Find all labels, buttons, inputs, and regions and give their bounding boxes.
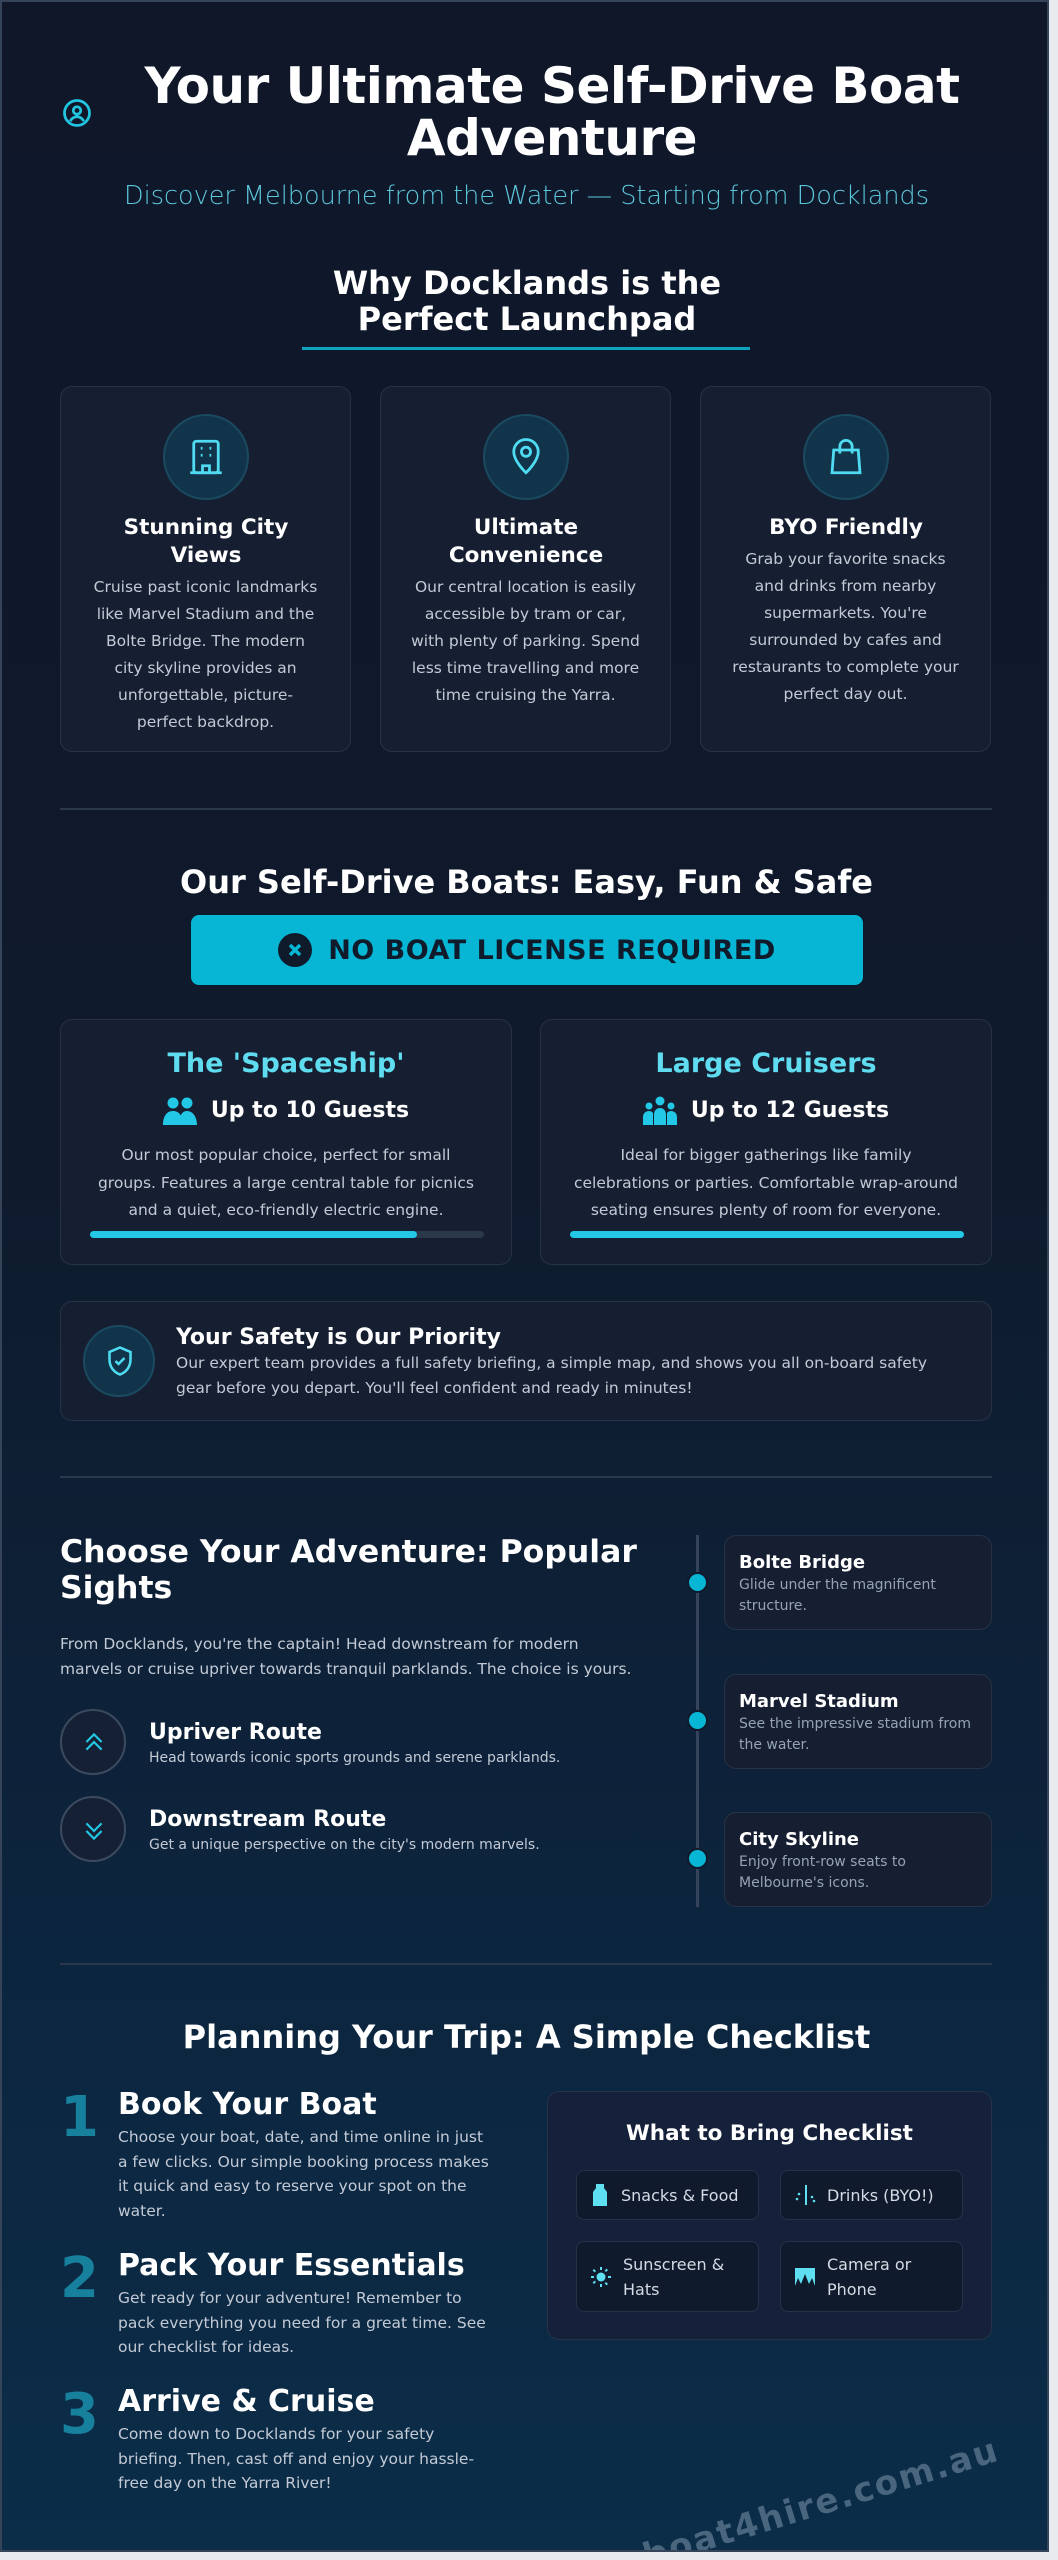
heading: choose adventure: Choose Your Adventure: Popular Sights (60, 1534, 637, 1606)
item: camera (780, 2241, 963, 2312)
stop: bolte bridge: Bolte Bridge (739, 1552, 865, 1573)
step 2: 2 (60, 2246, 99, 2311)
item: drinks (780, 2170, 963, 2220)
card text: supermarkets. You're (764, 604, 927, 622)
banner: no license: NO BOAT LICENSE REQUIRED (328, 934, 776, 966)
step 2: our checklist for ideas. (118, 2338, 294, 2356)
panel: what to bring (547, 2091, 992, 2340)
step 2: pack everything you need for a great time. See (118, 2314, 486, 2332)
icon: shopping bag (803, 414, 889, 500)
card text (411, 578, 640, 704)
step 3 (60, 2382, 474, 2492)
stop: bolte bridge (724, 1535, 992, 1630)
step 2: Get ready for your adventure! Remember to (118, 2289, 462, 2307)
panel: spaceship: The 'Spaceship' (167, 1048, 405, 1079)
card text: time cruising the Yarra. (435, 686, 616, 704)
card text: unforgettable, picture- (118, 686, 293, 704)
card text: less time travelling and more (412, 659, 639, 677)
card text: with plenty of parking. Spend (411, 632, 640, 650)
stop: city skyline (724, 1812, 992, 1907)
icon: building (163, 414, 249, 500)
card text: surrounded by cafes and (749, 631, 942, 649)
item: sunscreen (576, 2241, 759, 2312)
route: downstream: Downstream Route (149, 1807, 386, 1832)
guests line: Up to 10 Guests (211, 1098, 409, 1123)
panel: large cruisers: celebrations or parties. Comfortable wrap-around (574, 1174, 958, 1192)
stop: marvel stadium: Marvel Stadium (739, 1691, 899, 1712)
item: camera: Camera or (827, 2254, 911, 2274)
step 1: Choose your boat, date, and time online in just (118, 2128, 483, 2146)
panel: spaceship (60, 1019, 512, 1265)
route: upriver (60, 1709, 560, 1775)
step 1: water. (118, 2202, 166, 2220)
route: upriver: Upriver Route (149, 1720, 322, 1745)
step 3: Come down to Docklands for your safety (118, 2425, 434, 2443)
route: downstream: Get a unique perspective on the city's modern marvels. (149, 1837, 540, 1853)
card text: perfect backdrop. (137, 713, 274, 731)
item: sunscreen: Sunscreen & (623, 2254, 724, 2274)
title: Your Ultimate Self-Drive Boat Adventure (145, 57, 959, 167)
panel: what to bring: What to Bring Checklist (626, 2121, 913, 2146)
step 2: Pack Your Essentials (118, 2248, 465, 2283)
intro text: marvels or cruise upriver towards tranquil parklands. The choice is yours. (60, 1660, 631, 1678)
stop: bolte bridge: Glide under the magnificent structure. (739, 1577, 936, 1614)
capacity bar (90, 1231, 484, 1238)
stop: city skyline: City Skyline (739, 1829, 859, 1850)
card text: perfect day out. (783, 685, 908, 703)
timeline (687, 1535, 992, 1907)
icon: location pin (483, 414, 569, 500)
intro text: From Docklands, you're the captain! Head downstream for modern (60, 1635, 579, 1653)
panel: spaceship: and a quiet, eco-friendly electric engine. (128, 1201, 444, 1219)
route: downstream (60, 1796, 540, 1862)
panel: spaceship: Our most popular choice, perfect for small (122, 1146, 450, 1164)
card text: and drinks from nearby (755, 577, 936, 595)
panel: safety: gear before you depart. You'll feel confident and ready in minutes! (176, 1378, 693, 1396)
panel: large cruisers: Large Cruisers (655, 1048, 877, 1079)
panel: ultimate convenience (380, 386, 671, 752)
step 1: a few clicks. Our simple booking process makes (118, 2152, 489, 2170)
guests line: Up to 12 Guests (691, 1098, 889, 1123)
icon: x circle (278, 933, 312, 967)
heading: why docklands: Why Docklands is the Perfect Launchpad (333, 264, 721, 338)
panel: safety (60, 1301, 992, 1421)
route: upriver: Head towards iconic sports grounds and serene parklands. (149, 1750, 560, 1766)
stop: marvel stadium (724, 1674, 992, 1769)
panel: large cruisers (540, 1019, 992, 1265)
card title: BYO Friendly (769, 515, 923, 540)
heading: boats: Our Self-Drive Boats: Easy, Fun & Safe (180, 863, 873, 901)
panel: large cruisers: Ideal for bigger gatherings like family (620, 1146, 912, 1164)
step 1: Book Your Boat (118, 2087, 377, 2122)
step 3: briefing. Then, cast off and enjoy your hassle- (118, 2450, 474, 2468)
item: sunscreen: Hats (623, 2280, 659, 2298)
card text (732, 550, 959, 703)
panel: large cruisers: seating ensures plenty of room for everyone. (591, 1201, 941, 1219)
banner: no license (191, 915, 863, 985)
panel: safety: Your Safety is Our Priority (176, 1325, 501, 1350)
card title: Ultimate Convenience (449, 515, 603, 568)
intro text (60, 1635, 631, 1678)
card text: Bolte Bridge. The modern (106, 632, 305, 650)
step 3: 3 (60, 2382, 99, 2447)
item: drinks: Drinks (BYO!) (827, 2186, 934, 2204)
capacity bar (570, 1231, 964, 1238)
stop: city skyline: Enjoy front-row seats to Melbourne's icons. (739, 1854, 906, 1891)
header icon (63, 99, 91, 127)
card text: city skyline provides an (114, 659, 297, 677)
item: snacks: Snacks & Food (621, 2186, 739, 2204)
card text: restaurants to complete your (732, 658, 959, 676)
card text: Our central location is easily (415, 578, 636, 596)
card text: Cruise past iconic landmarks (94, 578, 317, 596)
step 3: Arrive & Cruise (118, 2384, 375, 2419)
step 3: free day on the Yarra River! (118, 2474, 332, 2492)
panel: safety: Our expert team provides a full safety briefing, a simple map, and shows you all on-board safety (176, 1354, 927, 1372)
item: camera: Phone (827, 2280, 877, 2298)
stop: marvel stadium: See the impressive stadium from the water. (739, 1716, 971, 1753)
panel: byo friendly (700, 386, 991, 752)
card text (94, 578, 317, 731)
card text: accessible by tram or car, (425, 605, 626, 623)
heading: planning: Planning Your Trip: A Simple Checklist (183, 2018, 870, 2056)
card text: like Marvel Stadium and the (97, 605, 314, 623)
step 2 (60, 2246, 486, 2356)
panel: stunning city views (60, 386, 351, 752)
step 1 (60, 2085, 489, 2220)
step 1: it quick and easy to reserve your spot on the (118, 2177, 467, 2195)
card text: Grab your favorite snacks (745, 550, 946, 568)
item: snacks (576, 2170, 759, 2220)
card title: Stunning City Views (124, 515, 288, 568)
step 1: 1 (60, 2085, 99, 2150)
panel: spaceship: groups. Features a large central table for picnics (98, 1174, 474, 1192)
subtitle: Discover Melbourne from the Water — Starting from Docklands (124, 181, 929, 211)
icon: shield (83, 1325, 155, 1397)
